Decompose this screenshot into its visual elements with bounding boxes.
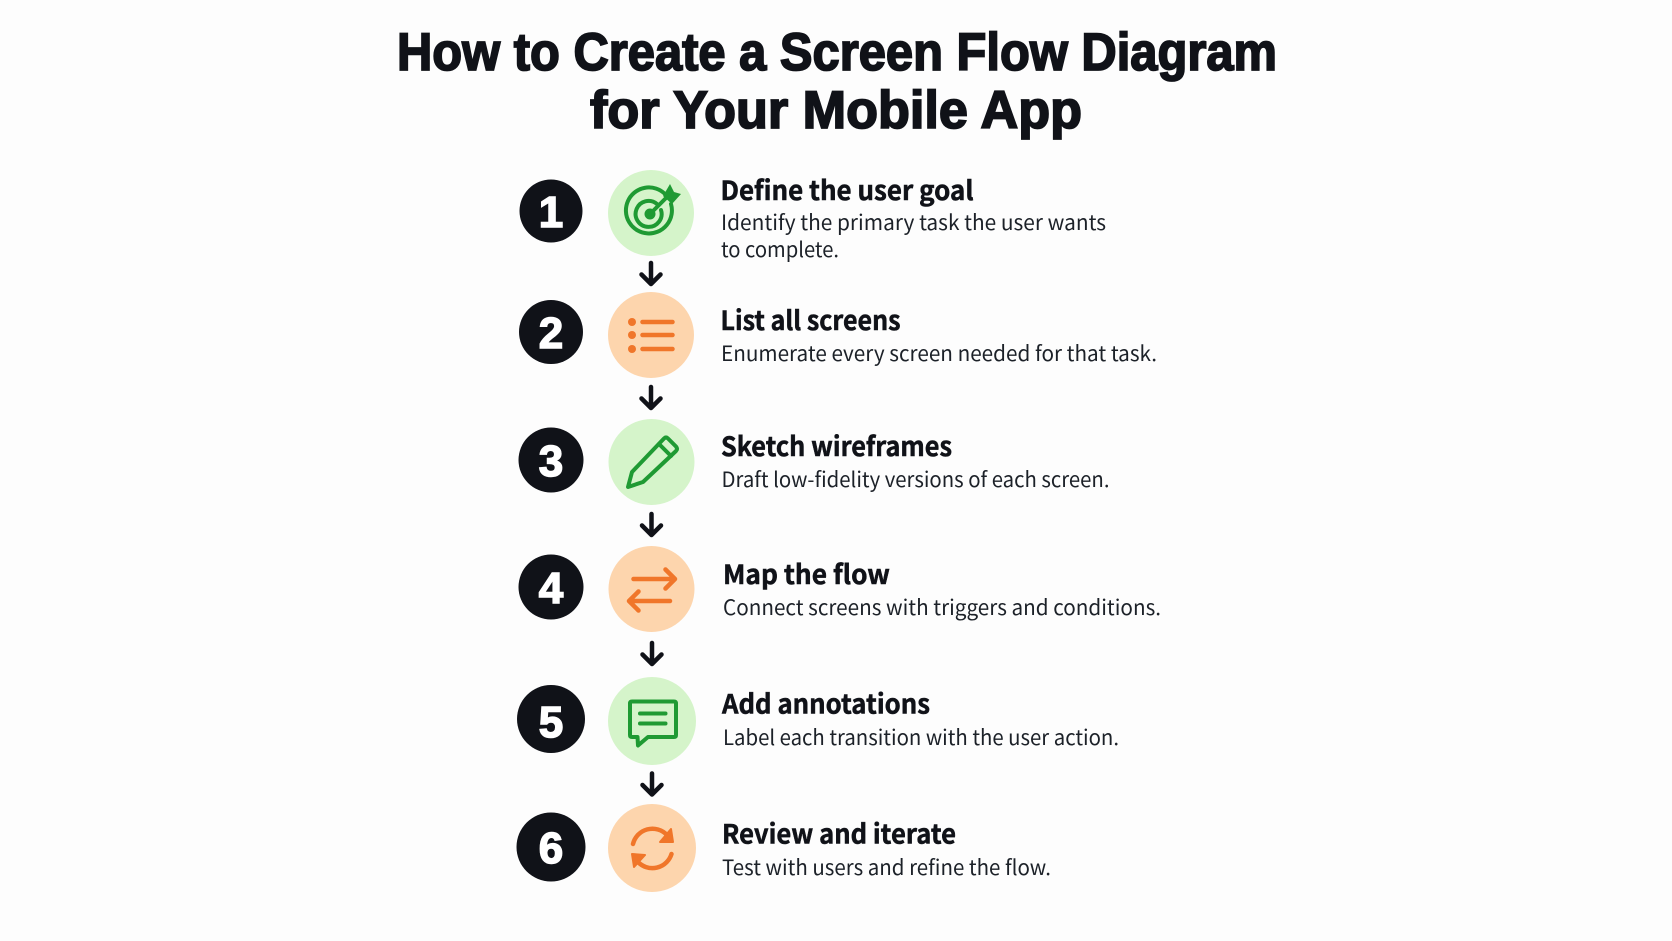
step 6 heading: Review and iterate	[722, 812, 956, 852]
icon: refresh	[608, 804, 696, 892]
number badge 3: 3	[539, 437, 563, 486]
title	[397, 23, 1277, 140]
number badge 1: 1	[539, 188, 563, 237]
step 1 description: to complete.	[721, 234, 839, 264]
icon: chat bubble	[608, 677, 696, 765]
arrow: step 2 to 3	[642, 387, 660, 408]
step 1 description: Identify the primary task the user wants	[721, 207, 1106, 237]
step 2 heading: List all screens	[720, 299, 900, 338]
icon: list	[608, 292, 694, 378]
number badge 5	[517, 685, 585, 753]
number badge 3	[518, 428, 584, 492]
number badge 2	[519, 300, 583, 364]
number badge 1	[520, 180, 582, 242]
number badge 4: 4	[539, 564, 564, 613]
step 1 heading: Define the user goal	[720, 169, 974, 208]
arrow: step 4 to 5	[642, 643, 662, 664]
step 3: sketch wireframes	[518, 419, 1110, 505]
step 2 description: Enumerate every screen needed for that task.	[721, 338, 1157, 368]
step 3 description: Draft low-fidelity versions of each screen.	[722, 464, 1110, 494]
step 4: map the flow	[518, 546, 1161, 632]
arrow: step 5 to 6	[642, 774, 662, 794]
step 4 description: Connect screens with triggers and conditions.	[723, 592, 1161, 622]
number badge 4	[518, 554, 584, 620]
title: for Your Mobile App	[590, 81, 1082, 140]
step 1 description	[721, 207, 1106, 264]
number badge 6: 6	[539, 824, 563, 873]
icon: swap arrows	[608, 546, 694, 632]
number badge 5: 5	[539, 698, 563, 747]
number badge 6	[516, 812, 586, 882]
step 5 description: Label each transition with the user action.	[723, 722, 1119, 752]
step 3 heading: Sketch wireframes	[721, 425, 952, 464]
step 1: define the user goal	[520, 169, 1106, 264]
arrow: step 3 to 4	[642, 514, 661, 535]
icon: pencil	[608, 419, 694, 505]
step 5 heading: Add annotations	[721, 682, 930, 722]
title: How to Create a Screen Flow Diagram	[397, 23, 1277, 82]
icon: target	[608, 170, 694, 256]
arrow: step 1 to 2	[642, 263, 660, 284]
number badge 2: 2	[539, 309, 563, 358]
step 6 description: Test with users and refine the flow.	[722, 852, 1051, 882]
step 4 heading: Map the flow	[723, 553, 890, 592]
step 6: review and iterate	[516, 804, 1051, 892]
step 2: list all screens	[519, 292, 1157, 378]
step 5: add annotations	[517, 677, 1119, 765]
